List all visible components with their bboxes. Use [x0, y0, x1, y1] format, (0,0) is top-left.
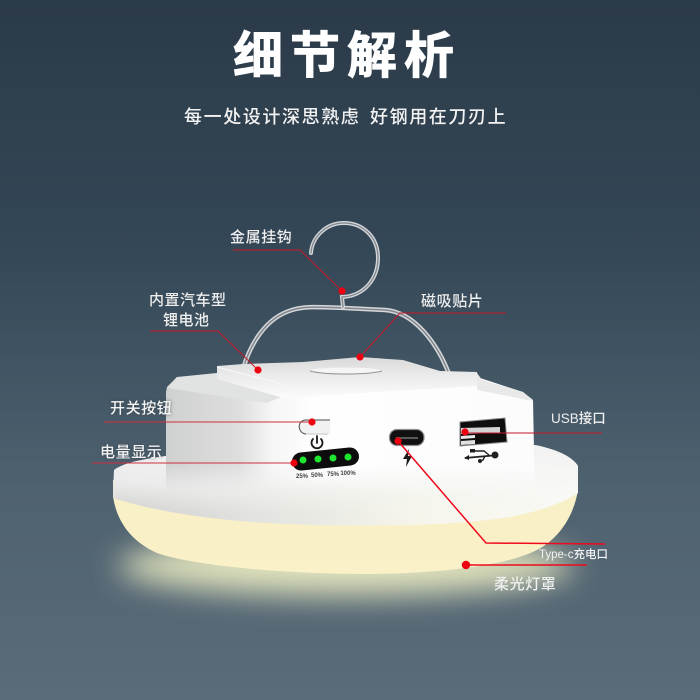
right chamfer — [477, 373, 533, 401]
callout: soft light shade: 柔光灯罩 — [494, 576, 556, 593]
callout: type-c charging port: Type-c充电口 — [539, 547, 608, 561]
battery indicator: 25% — [296, 474, 309, 480]
top plate — [217, 357, 477, 398]
callout: type-c charging port — [394, 437, 608, 561]
battery indicator: 50% — [311, 473, 324, 479]
callout: battery display — [92, 444, 298, 467]
callout: metal hook: 金属挂钩 — [230, 228, 292, 246]
callout: switch button: 开关按钮 — [110, 399, 172, 417]
subtitle: 好钢用在刀刃上 — [370, 107, 507, 127]
callout: magnetic patch: 磁吸贴片 — [421, 293, 483, 310]
callout: USB port: USB接口 — [551, 411, 606, 426]
lampshade — [113, 480, 578, 574]
title: 细节解析 — [233, 28, 461, 84]
callout: built-in battery — [149, 292, 262, 374]
battery indicator — [296, 454, 356, 480]
type-c port — [390, 430, 424, 446]
lamp glow — [118, 536, 574, 596]
icon: usb symbol — [464, 449, 498, 463]
hook — [311, 223, 378, 307]
battery indicator: 75% — [327, 472, 340, 478]
callout: metal hook — [230, 228, 346, 295]
callout: battery display: 电量显示 — [100, 444, 162, 461]
callout: switch button — [104, 399, 316, 426]
callout: USB port — [461, 411, 606, 436]
lamp body — [166, 377, 534, 484]
icon: power — [312, 436, 323, 448]
callout: built-in battery: 内置汽车型 — [149, 292, 227, 309]
white disc rim — [113, 445, 578, 525]
callout: built-in battery: 锂电池 — [163, 312, 210, 329]
disc top highlight — [113, 445, 578, 525]
left chamfer — [167, 373, 283, 403]
subtitle: 每一处设计深思熟虑 — [184, 107, 360, 127]
battery indicator: 100% — [340, 471, 356, 477]
usb port — [460, 418, 507, 446]
handle wire — [243, 307, 449, 374]
product: lamp — [113, 223, 578, 574]
callout: soft light shade — [462, 561, 587, 593]
icon: lightning — [403, 449, 412, 467]
switch — [298, 420, 330, 434]
callout: magnetic patch — [356, 293, 506, 361]
